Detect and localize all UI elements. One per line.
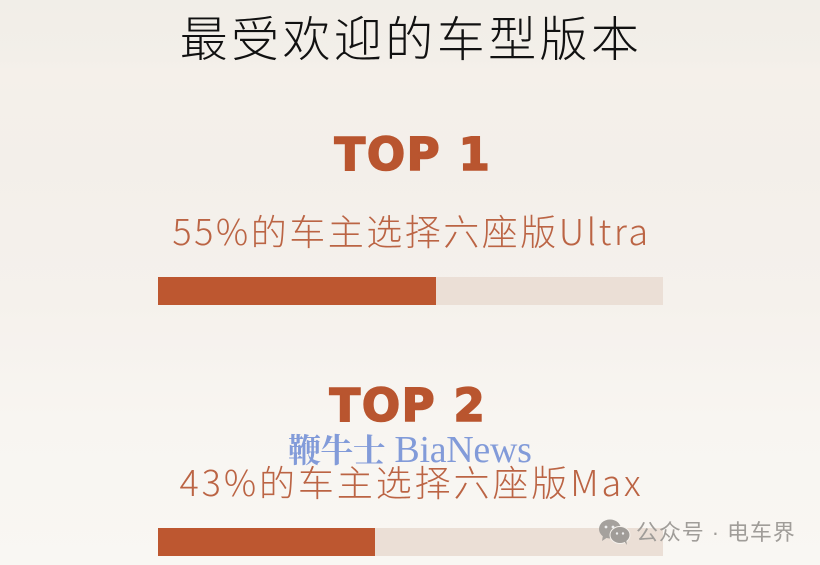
watermark: wechat account [599,520,796,545]
text: top 1 share: 55%的车主选择六座版Ultra [172,204,651,256]
watermark: BiaNews: 鞭牛士 BiaNews [288,429,532,471]
bar: top 1 55% [158,277,663,305]
panel: top 1 [158,128,663,305]
icon: wechat [599,520,630,545]
title: 最受欢迎的车型版本 [180,14,642,67]
panel: top 2 [158,379,663,556]
text: top 2 share: 43%的车主选择六座版Max [180,455,644,507]
heading: top 2: TOP 2 [330,379,486,432]
text: account name: 公众号 · 电车界 [636,520,796,545]
heading: top 1: TOP 1 [335,128,491,181]
bar: top 2 43% [158,528,663,556]
